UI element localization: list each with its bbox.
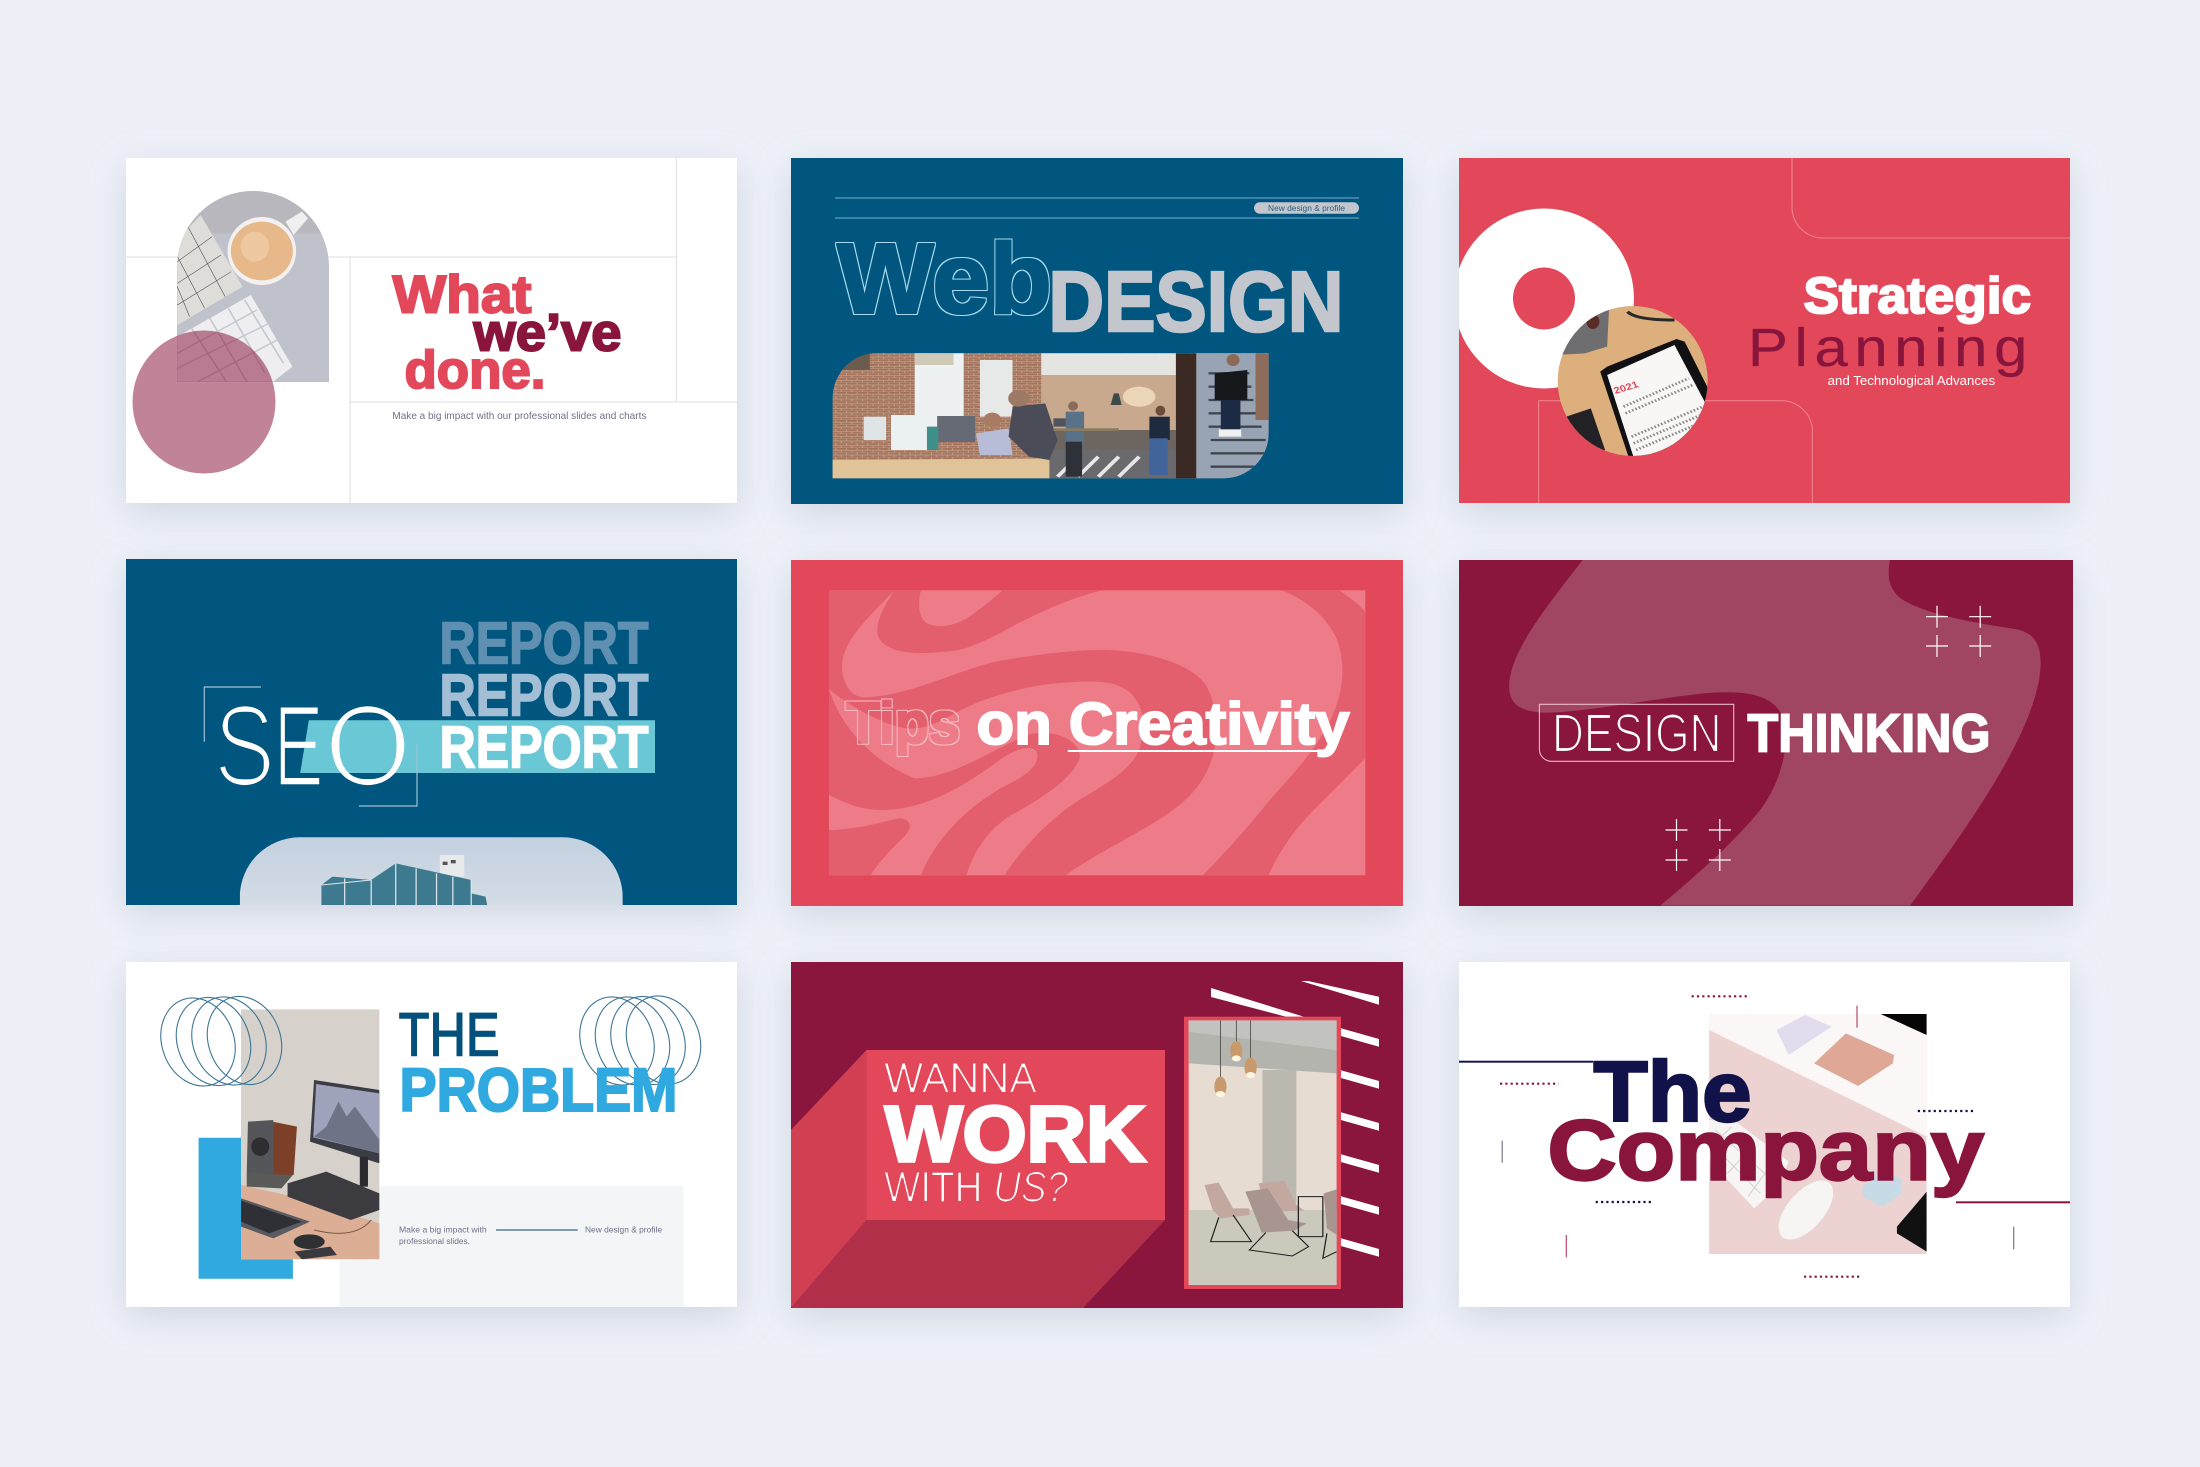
heading: Tips outline: Tips: [846, 691, 960, 756]
dotted accents: [1500, 996, 1976, 1277]
panel: Design Thinking slide: [1459, 560, 2073, 906]
caption left: Make a big impact with: [399, 1225, 487, 1235]
plus marks top right: [1926, 606, 1991, 657]
subtitle: and Technological Advances: [1828, 374, 1995, 388]
panel: Strategic Planning slide: [1454, 158, 2070, 503]
photo: glass building: [240, 837, 623, 907]
bracket top-left: [204, 687, 261, 742]
REPORT stack: [440, 610, 648, 781]
extrusion bottom: [791, 1220, 1165, 1308]
heading: The: The: [1594, 1045, 1752, 1140]
heading: SEO: E: [273, 683, 324, 811]
tag pill: [1254, 202, 1359, 214]
REPORT stack: REPORT: [440, 715, 648, 781]
caption right: New design & profile: [585, 1225, 662, 1235]
gray backing panel: [340, 1186, 684, 1307]
photo: open office: [829, 350, 1274, 482]
text: WORK: WORK: [885, 1089, 1146, 1178]
heading: What we've done: done.: [404, 341, 546, 400]
rings left: [149, 986, 294, 1097]
REPORT stack: REPORT: [440, 663, 648, 729]
REPORT stack: REPORT: [440, 610, 648, 676]
tick accents: [1502, 1006, 2014, 1257]
heading: What we've done: we’ve: [472, 304, 622, 363]
white stripes: [1211, 981, 1379, 1257]
extrusion left: [791, 1050, 866, 1308]
photo frame: [1184, 1017, 1341, 1289]
panel: Web Design slide: [791, 158, 1403, 504]
photo: pink desk: [1709, 1014, 1927, 1254]
panel: The Company slide: [1459, 962, 2070, 1307]
label box: [1539, 704, 1734, 761]
outline decoration bottom: [1539, 401, 1812, 503]
heading: Web outline: Web: [837, 223, 1052, 335]
panel: Tips on Creativity slide: [791, 560, 1403, 906]
connector line: [496, 1229, 578, 1231]
photo: phone calendar: [1558, 306, 1708, 456]
tag pill: New design & profile: [1268, 204, 1346, 213]
blue L shape: [199, 1138, 293, 1279]
rings right: [568, 985, 713, 1096]
underline: [1068, 750, 1325, 752]
outline decoration top right: [1792, 158, 2070, 238]
teal bar: [300, 720, 655, 773]
photo: desk with monitor: [241, 1009, 379, 1259]
subtitle text: Make a big impact with our professional slides and charts: [392, 410, 646, 422]
heading: SEO: S: [214, 683, 275, 811]
plus marks bottom: [1666, 819, 1731, 871]
headline box: [866, 1050, 1165, 1220]
line navy: [1459, 1061, 1593, 1063]
panel: What we've done slide: [126, 158, 737, 503]
caption left: [399, 1225, 487, 1246]
heading: Planning: Planning: [1748, 318, 2034, 378]
heading: PROBLEM: PROBLEM: [400, 1056, 678, 1124]
text: WANNA: WANNA: [884, 1055, 1037, 1103]
heading: What we've done: What: [392, 266, 532, 325]
text: WITH US?: WITH US?: [884, 1164, 1068, 1212]
heading: DESIGN: DESIGN: [1048, 255, 1344, 350]
panel: SEO Report slide: [126, 559, 737, 907]
photo: coffee and keyboard arch: [171, 190, 334, 383]
heading: on Creativity: on Creativity: [976, 691, 1350, 757]
organic shape: [1509, 560, 2041, 906]
heading: Strategic: Strategic: [1804, 267, 2031, 324]
heading: What we've done: [392, 266, 622, 400]
pink circle: [132, 330, 276, 474]
panel: Wanna Work With Us slide: [791, 962, 1403, 1308]
swirl pattern panel: [829, 590, 1365, 875]
heading: THE: THE: [399, 1001, 500, 1069]
heading: Company: Company: [1548, 1104, 1984, 1198]
photo: phone calendar: 2021: [1612, 380, 1641, 397]
photo: lounge with chairs: [1189, 1020, 1337, 1285]
heading: SEO: O: [325, 683, 411, 811]
white donut: [1454, 209, 1634, 388]
caption left: professional slides.: [399, 1236, 470, 1246]
panel: The Problem slide: [126, 962, 737, 1307]
heading: THINKING: THINKING: [1748, 703, 1990, 763]
bracket bottom-right: [359, 744, 417, 806]
line crimson: [1956, 1201, 2070, 1203]
heading: DESIGN thin: DESIGN: [1552, 703, 1721, 763]
